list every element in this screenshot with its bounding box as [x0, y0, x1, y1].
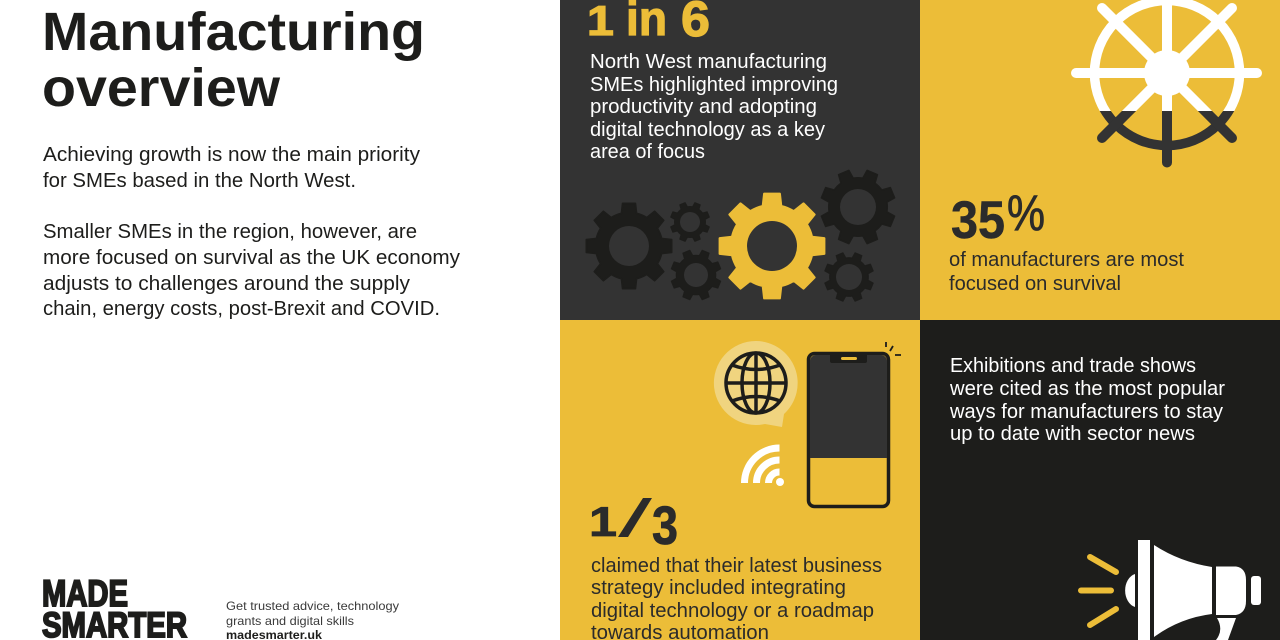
- description text: were cited as the most popular: [949, 378, 1225, 400]
- footer text: Get trusted advice, technology: [226, 599, 399, 613]
- statistic: 35%: %: [1007, 185, 1045, 241]
- description text: [591, 555, 882, 640]
- title: overview: [42, 58, 281, 118]
- statistic: 35%: 35: [951, 191, 1005, 250]
- description text: [949, 355, 1225, 445]
- description text: North West manufacturing: [590, 51, 827, 73]
- icon: globe speech bubble: [714, 341, 798, 427]
- statistic: 1/3: 1: [589, 498, 617, 545]
- description text: up to date with sector news: [950, 423, 1195, 445]
- description text: of manufacturers are most: [949, 249, 1184, 271]
- statistic: 35%: [951, 185, 1045, 250]
- description text: focused on survival: [949, 273, 1121, 295]
- statistic: 1/3: 3: [652, 496, 678, 556]
- icon: wifi: [744, 448, 784, 486]
- logo: Made Smarter: [42, 573, 187, 640]
- icon: gears: [586, 158, 907, 309]
- description text: digital technology or a roadmap: [591, 600, 874, 622]
- title: [42, 2, 425, 118]
- statistic: 1 in 6: [587, 0, 710, 47]
- statistic: 1/3: [589, 496, 678, 556]
- description text: area of focus: [590, 141, 705, 163]
- description text: claimed that their latest business: [591, 555, 882, 577]
- intro text: adjusts to challenges around the supply: [43, 273, 410, 295]
- panel: 35%: [920, 0, 1280, 320]
- panel: 1 in 6: [560, 0, 920, 320]
- description text: productivity and adopting: [590, 96, 817, 118]
- intro text: chain, energy costs, post-Brexit and COVID.: [43, 298, 440, 320]
- icon: smartphone: [808, 342, 901, 506]
- intro text: Achieving growth is now the main priority: [43, 144, 420, 166]
- icon: megaphone: [1081, 540, 1261, 640]
- description text: Exhibitions and trade shows: [950, 355, 1196, 377]
- panel: 1/3: [560, 320, 920, 640]
- left column: [0, 0, 560, 640]
- description text: SMEs highlighted improving: [590, 74, 838, 96]
- intro text: for SMEs based in the North West.: [43, 170, 356, 192]
- logo: Made Smarter: MADE: [42, 573, 128, 614]
- description text: strategy included integrating: [591, 577, 846, 599]
- intro text: more focused on survival as the UK economy: [43, 247, 460, 269]
- description text: [949, 249, 1184, 295]
- footer text: [226, 599, 399, 640]
- description text: ways for manufacturers to stay: [949, 401, 1223, 423]
- panel: exhibitions: [920, 320, 1280, 640]
- title: Manufacturing: [42, 2, 425, 62]
- description text: [590, 51, 838, 163]
- intro text: Smaller SMEs in the region, however, are: [43, 221, 417, 243]
- footer text: grants and digital skills: [226, 614, 354, 628]
- description text: digital technology as a key: [590, 119, 825, 141]
- icon: ship wheel: [1076, 0, 1257, 166]
- intro text: [43, 144, 460, 320]
